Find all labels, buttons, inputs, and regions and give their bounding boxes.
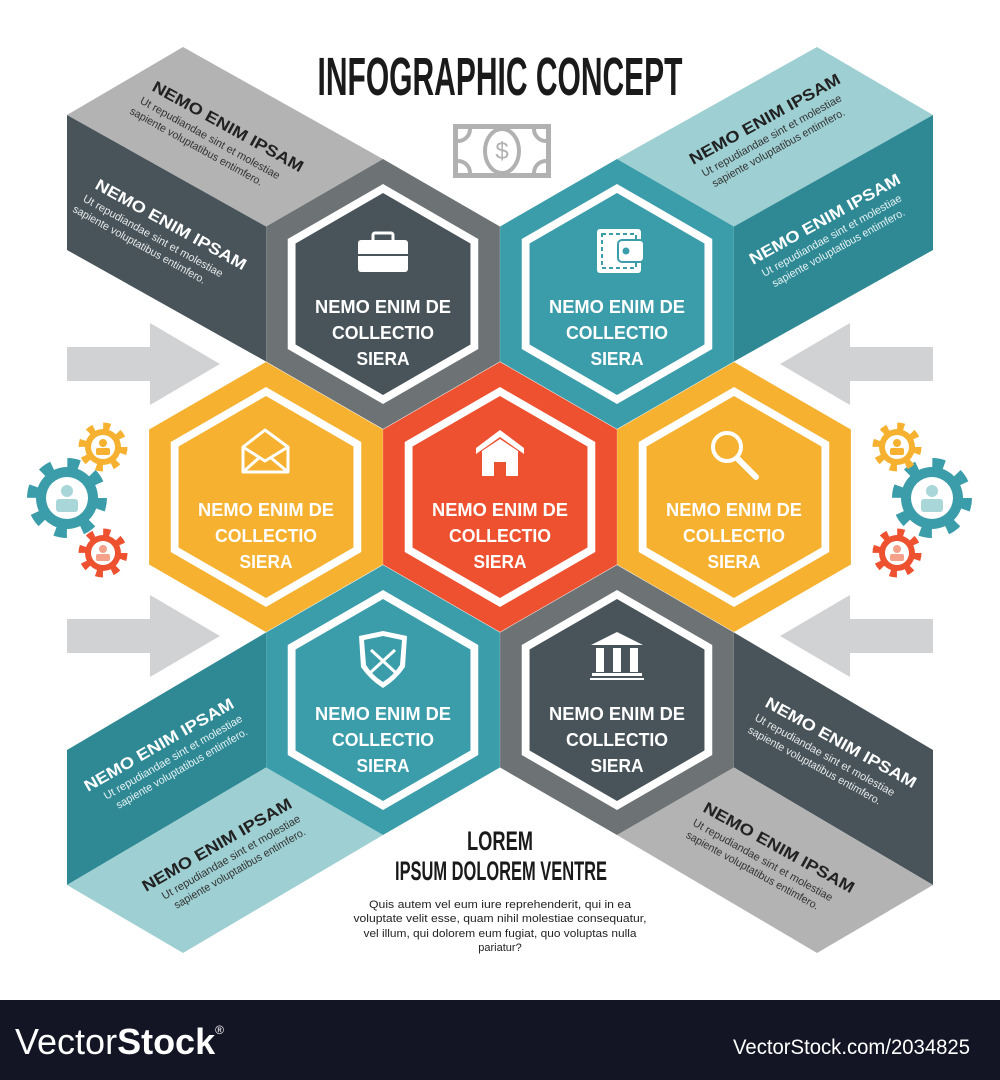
icon: briefcase xyxy=(358,233,408,272)
hex: bottom-right bank: COLLECTIO xyxy=(566,730,668,750)
icon: envelope xyxy=(243,430,288,472)
text: bottom-left bottom face: sapiente voluptatibus entimfero. xyxy=(172,826,308,912)
text: bottom-right bottom face xyxy=(684,799,857,923)
arrow: left top xyxy=(67,323,220,405)
hex: right magnifier: SIERA xyxy=(708,552,760,572)
watermark bar xyxy=(0,1000,1000,1080)
text: bottom-left side face: Ut repudiandae sint et molestiae xyxy=(102,713,245,802)
text: top-right top face: NEMO ENIM IPSAM xyxy=(687,71,844,168)
hex: top-right wallet: SIERA xyxy=(590,349,644,369)
panel: bottom-right block xyxy=(617,632,933,953)
text block: lorem xyxy=(354,826,646,954)
hex: right magnifier: COLLECTIO xyxy=(683,526,785,546)
icon: house xyxy=(476,430,524,476)
text: top-left side face: Ut repudiandae sint et molestiae xyxy=(81,193,225,280)
hex: top-left briefcase xyxy=(266,159,500,429)
hex: top-right wallet xyxy=(500,159,734,429)
text: top-left top face: sapiente voluptatibus entimfero. xyxy=(128,105,265,189)
hex: bottom-right bank xyxy=(500,565,734,835)
hex: left envelope: SIERA xyxy=(240,552,292,572)
text: bottom-right bottom face: sapiente voluptatibus entimfero. xyxy=(684,829,821,912)
text: top-right side face: sapiente voluptatibus entimfero. xyxy=(770,207,907,290)
text: bottom-right side face: Ut repudiandae sint et molestiae xyxy=(753,712,897,799)
hex: bottom-left shield xyxy=(266,565,500,835)
text: bottom-right side face xyxy=(746,694,919,818)
text block: lorem: LOREM xyxy=(467,826,533,856)
text block: lorem: voluptate velit esse, quam nihil molestiae consequatur, xyxy=(354,913,646,925)
panel: top-right block xyxy=(617,47,933,362)
hex: bottom-left shield: NEMO ENIM DE xyxy=(315,704,451,724)
text: bottom-right side face: sapiente voluptatibus entimfero. xyxy=(746,724,883,807)
hex: bottom-right bank: NEMO ENIM DE xyxy=(549,704,685,724)
hex: top-left briefcase: COLLECTIO xyxy=(332,323,434,343)
text: bottom-left bottom face: NEMO ENIM IPSAM xyxy=(140,796,295,895)
hex: top-right wallet: COLLECTIO xyxy=(566,323,668,343)
icon: wallet xyxy=(597,229,644,273)
watermark bar: ® xyxy=(215,1023,224,1037)
text: bottom-left side face: sapiente voluptatibus entimfero. xyxy=(114,726,250,812)
arrow: right top xyxy=(780,323,933,405)
text: top-right side face: Ut repudiandae sint et molestiae xyxy=(760,193,904,280)
hex: top-left briefcase: SIERA xyxy=(356,349,410,369)
hex: center house: NEMO ENIM DE xyxy=(432,500,568,520)
text: top-right top face: sapiente voluptatibus entimfero. xyxy=(710,107,847,190)
hex: left envelope: NEMO ENIM DE xyxy=(198,500,334,520)
text block: lorem: vel illum, qui dolorem eum fugiat, quo voluptas nulla xyxy=(364,928,637,940)
hex: right magnifier xyxy=(617,362,851,632)
hex: left envelope: COLLECTIO xyxy=(215,526,317,546)
text: top-right side face xyxy=(747,171,918,294)
text: bottom-left bottom face xyxy=(140,796,310,921)
text: top-right top face xyxy=(687,71,858,194)
text: bottom-right bottom face: Ut repudiandae sint et molestiae xyxy=(691,817,835,904)
hex: bottom-left shield: COLLECTIO xyxy=(332,730,434,750)
title: INFOGRAPHIC CONCEPT xyxy=(318,47,683,107)
text: bottom-left bottom face: Ut repudiandae sint et molestiae xyxy=(160,813,303,902)
text: top-left side face: sapiente voluptatibus entimfero. xyxy=(71,203,208,287)
text: top-left top face: NEMO ENIM IPSAM xyxy=(149,79,306,176)
hex: center house xyxy=(383,362,617,632)
text: top-right side face: NEMO ENIM IPSAM xyxy=(747,171,904,268)
panel: bottom-left block xyxy=(67,632,383,953)
text: bottom-left side face: NEMO ENIM IPSAM xyxy=(82,696,237,795)
watermark bar: VectorStock.com/2034825 xyxy=(733,1036,970,1059)
text: top-right top face: Ut repudiandae sint et molestiae xyxy=(700,93,844,180)
text block: lorem: pariatur? xyxy=(478,942,522,954)
text: top-left side face: NEMO ENIM IPSAM xyxy=(92,177,249,274)
text block: lorem: IPSUM DOLOREM VENTRE xyxy=(395,856,607,886)
hex: top-left briefcase: NEMO ENIM DE xyxy=(315,297,451,317)
icon: left gears xyxy=(32,426,124,574)
icon: shield xyxy=(359,631,407,688)
icon: right gears xyxy=(876,426,967,574)
hex: bottom-right bank: SIERA xyxy=(590,756,644,776)
text block: lorem: Quis autem vel eum iure reprehenderit, qui in ea xyxy=(369,899,632,911)
hex: top-right wallet: NEMO ENIM DE xyxy=(549,297,685,317)
hex: left envelope xyxy=(149,362,383,632)
arrow: left bottom xyxy=(67,595,220,677)
icon: dollar bill xyxy=(456,126,548,176)
text: bottom-left side face xyxy=(82,696,252,821)
text: bottom-right bottom face: NEMO ENIM IPSAM xyxy=(700,800,857,897)
panel: top-left block xyxy=(67,47,383,362)
icon: magnifier xyxy=(713,433,756,477)
hex: bottom-left shield: SIERA xyxy=(356,756,410,776)
hex: center house: COLLECTIO xyxy=(449,526,551,546)
hex: center house: SIERA xyxy=(474,552,526,572)
text: bottom-right side face: NEMO ENIM IPSAM xyxy=(762,695,919,792)
watermark bar: VectorStock xyxy=(15,1021,215,1062)
icon: dollar bill: $ xyxy=(495,138,509,165)
hex: right magnifier: NEMO ENIM DE xyxy=(666,500,802,520)
icon: bank xyxy=(590,632,644,680)
text: top-left top face xyxy=(128,75,306,202)
text: top-left side face xyxy=(71,173,249,300)
arrow: right bottom xyxy=(780,595,933,677)
text: top-left top face: Ut repudiandae sint et molestiae xyxy=(138,95,282,182)
